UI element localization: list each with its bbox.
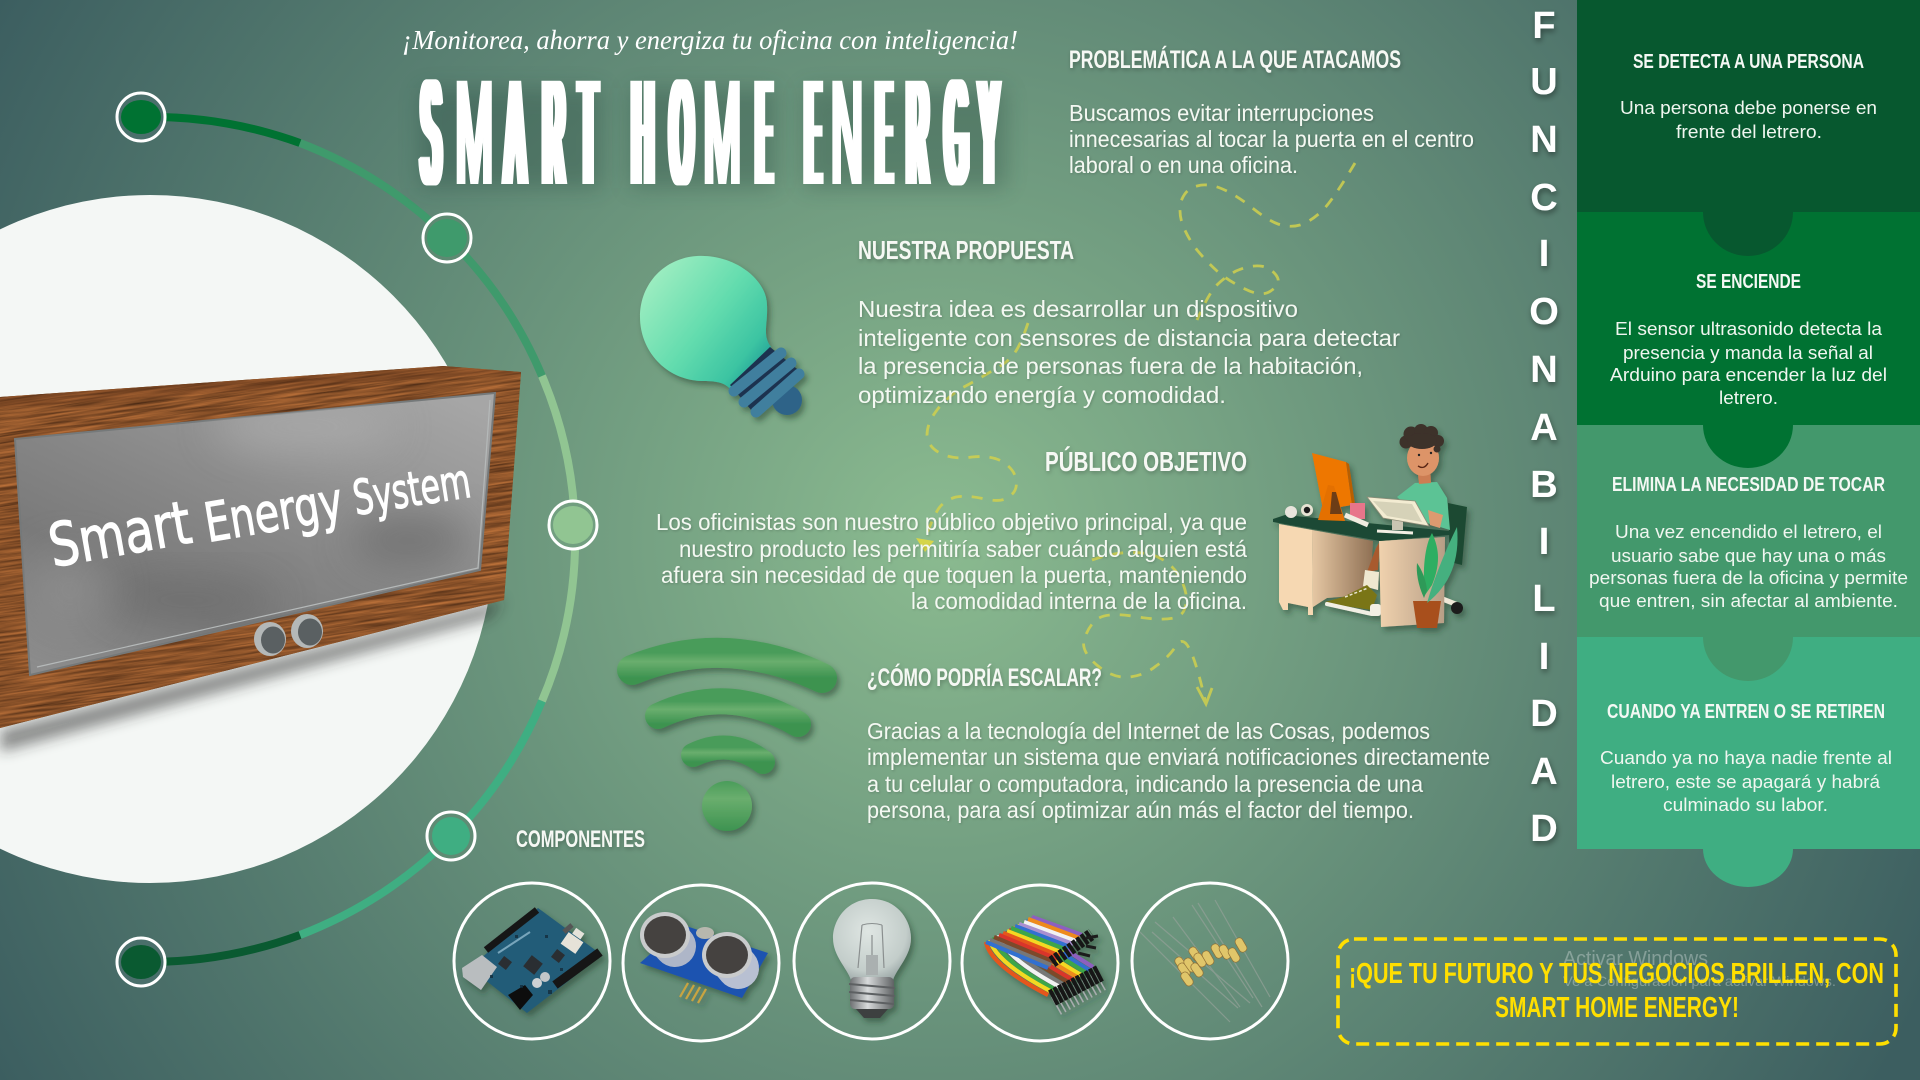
vertical word FUNCIONABILIDAD: A	[1530, 751, 1558, 793]
section: nuestra propuesta: optimizando energía y comodidad.	[858, 382, 1226, 408]
section: público objetivo: PÚBLICO OBJETIVO	[1045, 446, 1247, 477]
icon: light bulb	[640, 256, 802, 417]
panel: step 4: letrero, este se apagará y habrá	[1611, 772, 1881, 792]
section: problemática: laboral o en una oficina.	[1069, 152, 1298, 178]
section: cómo podría escalar: ¿CÓMO PODRÍA ESCALAR?	[867, 662, 1102, 692]
vertical word FUNCIONABILIDAD: I	[1539, 233, 1549, 275]
callout: yellow dashed slogan	[1338, 939, 1896, 1044]
tagline: ¡Monitorea, ahorra y energiza tu oficina con inteligencia!	[402, 25, 1018, 55]
main title: RGY	[907, 48, 998, 216]
panel: step 2: El sensor ultrasonido detecta la	[1615, 319, 1883, 339]
panel: step 3: Una vez encendido el letrero, el	[1615, 522, 1882, 542]
main title: HO	[633, 48, 693, 216]
panel: step 1: Una persona debe ponerse en	[1620, 98, 1877, 118]
section: público objetivo: Los oficinistas son nuestro público objetivo principal, ya que	[656, 509, 1247, 535]
vertical word FUNCIONABILIDAD: N	[1530, 349, 1558, 391]
3D sign: Smart Energy System: Smart	[43, 488, 196, 582]
panel: step 4: culminado su labor.	[1663, 795, 1828, 815]
section: problemática: innecesarias al tocar la puerta en el centro	[1069, 126, 1474, 152]
component: ultrasonic sensor	[623, 885, 779, 1041]
component: arduino board	[454, 883, 610, 1039]
section: público objetivo: la comodidad interna de la oficina.	[911, 588, 1247, 614]
section: problemática: PROBLEMÁTICA A LA QUE ATACAMOS	[1069, 45, 1401, 74]
main title: M	[456, 50, 493, 217]
main title	[420, 48, 1006, 217]
panel: step 2: presencia y manda la señal al	[1623, 343, 1873, 363]
main title: S	[421, 48, 440, 216]
timeline arc with five nodes	[117, 93, 597, 986]
main title: ART	[506, 48, 597, 216]
section: nuestra propuesta: inteligente con sensores de distancia para detectar	[858, 325, 1400, 351]
main title: E	[877, 48, 891, 216]
section: nuestra propuesta	[858, 235, 1400, 408]
panel: step 1: frente del letrero.	[1676, 122, 1822, 142]
heading: componentes: COMPONENTES	[516, 826, 645, 853]
component: jumper wires	[962, 885, 1118, 1041]
panel: step 2	[1577, 212, 1920, 425]
vertical word FUNCIONABILIDAD: D	[1530, 808, 1558, 850]
main title: E	[757, 48, 771, 216]
section: público objetivo: nuestro producto les permitiría saber cuándo alguien está	[679, 536, 1247, 562]
section: cómo podría escalar	[867, 662, 1490, 823]
vertical word FUNCIONABILIDAD: L	[1532, 578, 1556, 620]
vertical word FUNCIONABILIDAD: I	[1539, 521, 1549, 563]
section: público objetivo	[656, 446, 1247, 614]
main title: N	[831, 50, 863, 217]
vertical word FUNCIONABILIDAD: D	[1530, 693, 1558, 735]
yellow dashed path: middle	[926, 323, 1028, 536]
windows watermark	[1563, 948, 1836, 989]
panel: step 3	[1577, 425, 1920, 637]
section: nuestra propuesta: NUESTRA PROPUESTA	[858, 235, 1074, 265]
vertical word FUNCIONABILIDAD: U	[1530, 61, 1558, 103]
section: cómo podría escalar: implementar un sistema que enviará notificaciones directamente	[867, 744, 1490, 770]
panel: step 3: usuario sabe que hay una o más	[1611, 546, 1886, 566]
panel: step 4: Cuando ya no haya nadie frente al	[1600, 748, 1892, 768]
decorative white circle	[0, 195, 494, 883]
vertical word FUNCIONABILIDAD: N	[1530, 119, 1558, 161]
section: nuestra propuesta: Nuestra idea es desarrollar un dispositivo	[858, 296, 1298, 322]
3D sign: Smart Energy System: System	[349, 453, 474, 527]
section: cómo podría escalar: Gracias a la tecnología del Internet de las Cosas, podemos	[867, 718, 1430, 744]
yellow arrowhead	[916, 538, 934, 552]
windows watermark: Ve a Configuración para activar Windows.	[1563, 973, 1836, 989]
section: público objetivo: afuera sin necesidad de que toquen la puerta, manteniendo	[661, 562, 1247, 588]
vertical word FUNCIONABILIDAD	[1529, 5, 1559, 850]
vertical word FUNCIONABILIDAD: I	[1539, 636, 1549, 678]
vertical word FUNCIONABILIDAD: C	[1530, 177, 1558, 219]
section: cómo podría escalar: persona, para así optimizar aún más el factor del tiempo.	[867, 797, 1414, 823]
3D sign: Smart Energy System	[0, 366, 521, 759]
panel: step 1	[1577, 0, 1920, 212]
section: problemática: Buscamos evitar interrupciones	[1069, 100, 1374, 126]
illustration: person working at desk	[1273, 424, 1467, 628]
section: nuestra propuesta: la presencia de personas fuera de la habitación,	[858, 353, 1363, 379]
windows watermark: Activar Windows	[1563, 948, 1708, 970]
icon: wifi	[632, 653, 822, 831]
section: cómo podría escalar: a tu celular o computadora, indicando la presencia de una	[867, 771, 1423, 797]
vertical word FUNCIONABILIDAD: O	[1529, 291, 1559, 333]
main title: M	[704, 50, 741, 217]
component: resistors	[1132, 883, 1288, 1039]
panel: step 2: SE ENCIENDE	[1696, 271, 1801, 293]
panel: step 1: SE DETECTA A UNA PERSONA	[1633, 51, 1864, 73]
main title: E	[806, 48, 820, 216]
section: problemática	[1069, 45, 1474, 178]
component: incandescent bulb	[794, 883, 950, 1039]
vertical word FUNCIONABILIDAD: F	[1532, 5, 1556, 47]
panel: step 3: que entren, sin afectar al ambiente.	[1599, 591, 1898, 611]
vertical word FUNCIONABILIDAD: B	[1530, 464, 1558, 506]
panel: step 3: personas fuera de la oficina y permite	[1589, 568, 1908, 588]
callout: yellow dashed slogan: SMART HOME ENERGY!	[1495, 992, 1739, 1024]
3D sign: Smart Energy System: Energy	[200, 470, 347, 555]
panel: step 4	[1577, 637, 1920, 887]
yellow dashed path: lower with arrow	[1084, 552, 1212, 704]
vertical word FUNCIONABILIDAD: A	[1530, 407, 1558, 449]
panel: step 2: Arduino para encender la luz del	[1610, 365, 1887, 385]
yellow dashed path: upper loop	[1180, 163, 1355, 320]
panel: step 2: letrero.	[1719, 388, 1778, 408]
